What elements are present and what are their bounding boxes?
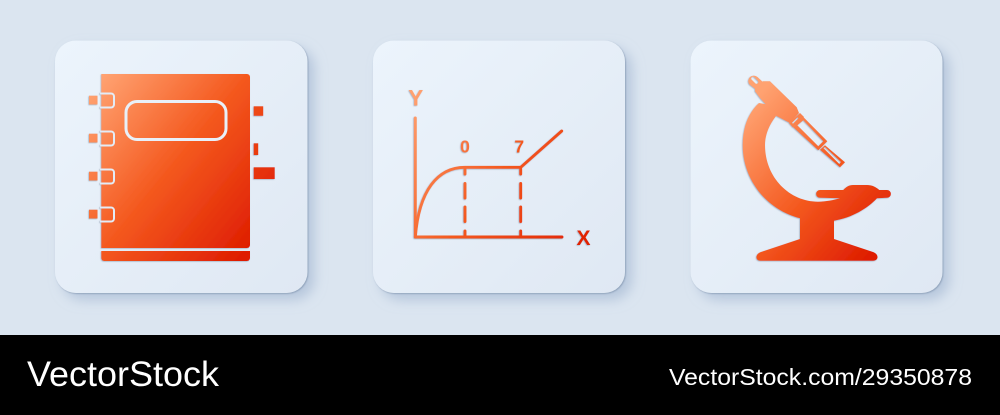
panel: graph card <box>373 40 625 293</box>
chart: line graph icon: Y <box>408 86 423 111</box>
brand wordmark: VectorStock <box>27 355 220 394</box>
icon: notebook <box>89 74 275 261</box>
chart: line graph icon <box>408 86 591 250</box>
image id text: VectorStock.com/29350878 <box>669 364 972 390</box>
icon: microscope <box>743 76 891 261</box>
chart: line graph icon: 0 <box>460 136 470 156</box>
chart: line graph icon: 7 <box>514 136 524 156</box>
chart: line graph icon: X <box>576 227 591 250</box>
footer bar <box>0 335 1000 415</box>
panel: notebook card <box>55 40 308 293</box>
panel: microscope card <box>690 40 942 293</box>
